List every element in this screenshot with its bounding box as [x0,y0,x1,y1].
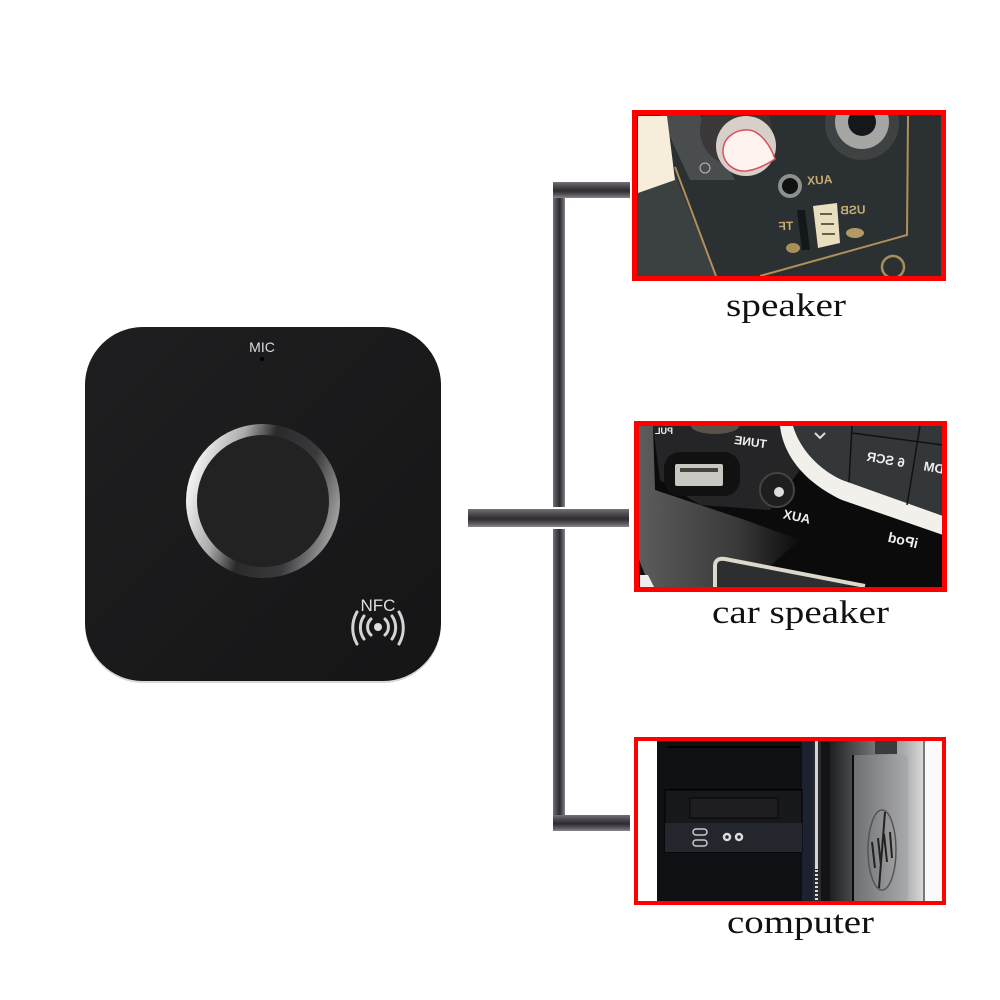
connecting cables [468,182,630,831]
speaker frame [634,112,944,278]
device body [85,327,441,681]
car port labels: iPod [887,529,920,551]
mic hole [260,357,264,361]
speaker photo [637,115,941,276]
computer port labels [693,829,742,846]
button ring [192,430,334,572]
car port labels: TUNE [733,433,768,451]
car port labels [654,426,945,551]
panel: computer [636,739,944,941]
car port labels: 6 SCR [865,449,906,470]
panel: car speaker [636,418,945,631]
computer hp logo [868,810,896,890]
computer frame [636,739,944,903]
speaker port labels: USB [840,203,866,217]
car speaker label: car speaker [712,595,889,631]
speaker port labels: TF [778,219,793,233]
car port labels: PUL [654,426,673,436]
panel: speaker [634,86,944,324]
mic label: MIC [249,339,275,355]
car port labels: DM [923,458,945,477]
computer photo [657,741,925,901]
car speaker frame [636,424,944,590]
speaker port labels: AUX [807,172,833,188]
car speaker photo [639,418,945,590]
computer label: computer [727,905,874,941]
nfc icon [353,612,403,644]
device: bluetooth receiver [85,327,441,683]
speaker label: speaker [726,288,846,324]
car port labels: AUX [782,506,812,527]
speaker port labels [778,175,865,230]
nfc label: NFC [361,596,395,615]
